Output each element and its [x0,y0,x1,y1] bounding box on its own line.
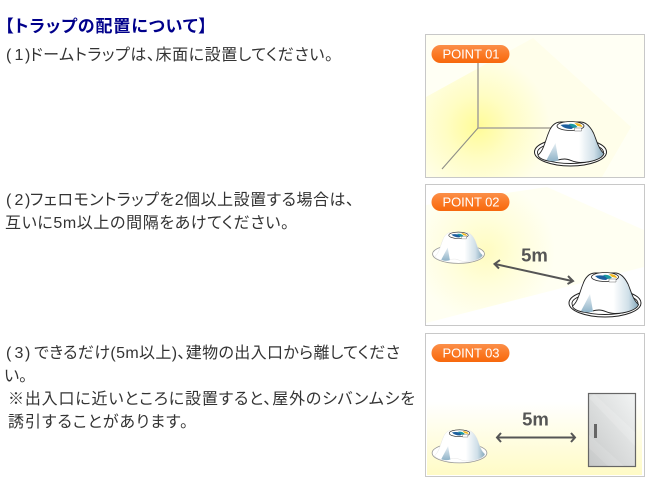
badge: point 02: POINT 02 [442,194,500,210]
text block: instruction 3 [4,344,415,431]
text block: instruction 2 [5,191,354,232]
text block: instruction 2: (2) [6,192,30,209]
text block: instruction 1: (1) [6,47,30,64]
badge: point 03 [432,344,510,362]
badge: point 01: POINT 01 [442,46,500,62]
text block: instruction 2: フェロモントラップを2個以上設置する場合は、 [30,191,354,209]
arrow: distance [497,433,575,442]
text block: instruction 3: 誘引することがあります。 [8,413,188,431]
text block: instruction 3: できるだけ(5m以上)、建物の出入口から離してくださ [34,344,400,362]
text block: instruction 3: い。 [4,368,27,385]
text block: instruction 1: ドームトラップは、床面に設置してください。 [30,46,333,64]
icon: dome trap [534,122,606,166]
title: 【トラップの配置について】 [5,17,207,36]
text block: instruction 3: ※出入口に近いところに設置すると、屋外のシバンムシを [8,390,415,408]
distance label: 5m [521,244,548,266]
background glow [426,35,644,177]
floor gradient [427,402,642,475]
panel: point 02 [426,184,644,326]
panel: point 03 [426,334,644,476]
background glow [426,187,644,323]
badge: point 02 [432,193,510,211]
icon: dome trap, near [569,272,641,317]
panel: point 01 [426,34,644,178]
icon: dome trap, far [433,232,484,263]
icon: door [588,394,636,466]
text block: instruction 2: 互いに5m以上の間隔をあけてください。 [5,214,289,232]
text block: instruction 3: (3) [6,345,30,362]
arrow: distance [494,260,573,284]
icon: dome trap [432,430,487,463]
distance label: 5m [522,408,549,430]
badge: point 01 [432,45,510,63]
room corner axes [442,63,552,169]
badge: point 03: POINT 03 [442,346,500,360]
